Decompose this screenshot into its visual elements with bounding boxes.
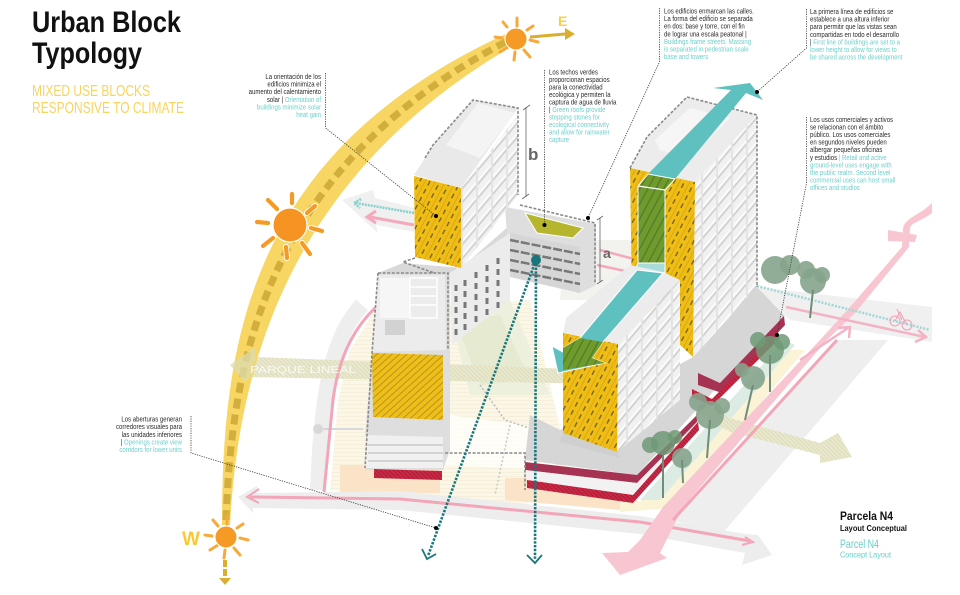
arrowhead: parque lineal overlaps the sun path: PARQUE LINEAL	[250, 364, 356, 376]
arrowhead: parque lineal overlaps the sun path	[230, 347, 356, 382]
icon: sun overhead	[257, 194, 322, 258]
note: first line of buildings: lower height to allow for views to	[810, 47, 897, 54]
teal view arrow on roof	[648, 83, 763, 179]
note: orientation: La orientación de los	[265, 74, 322, 81]
arrow: west-bound at upper left	[342, 190, 645, 272]
note: first line of buildings: establece a una altura inferior	[810, 16, 890, 24]
subtitle: MIXED USE BLOCKS	[32, 83, 150, 100]
note: openings: las unidades inferiores	[122, 432, 183, 439]
note: green roofs	[549, 69, 617, 144]
note: orientation: aumento del calentamiento	[249, 89, 321, 96]
note: retail uses: Los usos comerciales y activos	[810, 117, 894, 124]
leader lines	[191, 8, 806, 530]
label: W: W	[182, 529, 200, 550]
note: retail uses: en segundos niveles pueden	[810, 139, 887, 147]
note: orientation	[249, 74, 322, 119]
subtitle: RESPONSIVE TO CLIMATE	[32, 100, 184, 117]
arrow: parque lineal	[250, 357, 852, 463]
note: orientation: heat gain	[296, 112, 321, 119]
note: retail uses: commercial uses can host small	[810, 177, 896, 185]
arrow: pink pedestrian route west	[247, 308, 753, 545]
note: green roofs: and allow for rainwater	[549, 129, 610, 137]
tower: upper left with yellow facade	[378, 100, 596, 345]
podium with red retail bands	[525, 287, 785, 503]
caption: parcel: Concept Layout	[840, 550, 892, 560]
subtitle	[32, 83, 184, 117]
note: retail uses: the public realm. Second level	[810, 170, 891, 177]
note: first line of buildings: compartidas en todo el desarrollo	[810, 32, 899, 39]
note: orientation: edificios minimiza el	[267, 81, 321, 89]
note: retail uses: y estudios | Retail and active	[810, 155, 887, 162]
note: first line of buildings: para permitir que las vistas sean	[810, 24, 897, 31]
view corridor arrows	[422, 255, 542, 563]
teal view arrow with green strip	[552, 270, 663, 373]
note: orientation: solar | Orientation of	[267, 97, 321, 104]
note: retail uses: offices and studios	[810, 185, 860, 192]
icon: sun east	[495, 18, 538, 60]
title: Typology	[32, 37, 142, 70]
note: first line of buildings	[810, 9, 903, 62]
note: green roofs: | Green roofs provide	[549, 107, 606, 114]
dimension: b: b	[528, 145, 538, 164]
note: green roofs: stepping stones for	[549, 114, 601, 122]
tower: lower left with yellow facade	[365, 273, 525, 490]
note: buildings frame streets: Buildings frame streets. Massing	[664, 39, 751, 46]
note: buildings frame streets: is separated in pedestrian scale	[664, 46, 749, 54]
caption: parcel: Parcel N4	[840, 539, 879, 551]
note: retail uses: ground-level uses engage with	[810, 162, 892, 170]
green facade strip	[638, 174, 675, 263]
dimension: a	[597, 216, 611, 284]
note: green roofs: proporcionan espacios	[549, 77, 610, 84]
ground plane and streets	[238, 240, 932, 565]
icon: sun west	[205, 516, 248, 558]
caption: parcel: Layout Conceptual	[840, 523, 907, 533]
note: buildings frame streets: de lograr una escala peatonal |	[664, 31, 747, 39]
note: openings	[116, 416, 183, 454]
note: green roofs: captura de agua de lluvia	[549, 99, 617, 107]
note: buildings frame streets: base and towers	[664, 54, 709, 61]
note: buildings frame streets: Los edificios enmarcan las calles.	[664, 8, 754, 16]
note: first line of buildings: La primera línea de edificios se	[810, 9, 894, 16]
note: green roofs: para la conectividad	[549, 84, 603, 92]
green roof	[525, 213, 583, 238]
note: buildings frame streets: en dos: base y torre, con el fin	[664, 23, 745, 31]
note: green roofs: ecológica y permiten la	[549, 92, 611, 99]
caption: parcel: Parcela N4	[840, 511, 894, 523]
note: green roofs: ecological connectivity	[549, 122, 610, 129]
note: green roofs: capture	[549, 137, 569, 144]
note: buildings frame streets: La forma del edificio se separada	[664, 16, 753, 23]
sun path arc	[219, 28, 575, 585]
tower: right tall	[630, 83, 763, 357]
note: openings: corredores visuales para	[116, 424, 182, 431]
title	[32, 6, 181, 70]
note: openings: | Openings create view	[121, 439, 182, 447]
caption: parcel	[840, 511, 907, 560]
note: openings: Los aberturas generan	[121, 416, 182, 424]
note: openings: corridors for lower units	[119, 447, 183, 454]
pink cycle route	[602, 203, 932, 575]
note: green roofs: Los techos verdes	[549, 69, 599, 77]
tower: centre front with yellow facade	[552, 265, 680, 458]
note: first line of buildings: be shared across the development	[810, 54, 903, 62]
note: retail uses: se relacionan con el ámbito	[810, 124, 884, 132]
note: orientation: buildings minimize solar	[257, 104, 322, 112]
note: first line of buildings: | First line of buildings are set to a	[810, 39, 900, 47]
note: retail uses: albergar pequeñas oficinas	[810, 147, 883, 154]
label: E: E	[558, 13, 567, 29]
dimension: b	[522, 105, 538, 199]
dimension: a: a	[603, 245, 611, 261]
note: retail uses	[810, 117, 896, 192]
icon: cyclist	[890, 309, 912, 330]
note: retail uses: público. Los usos comerciales	[810, 132, 891, 139]
note: buildings frame streets	[664, 8, 754, 61]
trees	[642, 255, 830, 498]
title: Urban Block	[32, 6, 181, 39]
